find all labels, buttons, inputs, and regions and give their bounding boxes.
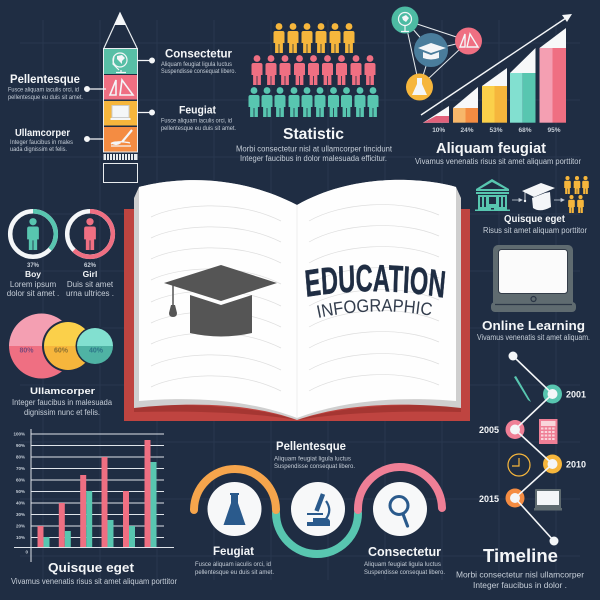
icon: microscope circle	[291, 482, 345, 536]
icon: laptop	[110, 106, 130, 120]
year labels	[479, 390, 586, 504]
axis labels: 90%	[16, 443, 25, 448]
chart grid and axes	[14, 429, 174, 562]
pink bars	[38, 440, 150, 547]
icon: flask circle	[208, 482, 262, 536]
text: pellentesque	[274, 439, 355, 470]
axis labels: 40%	[16, 500, 25, 506]
text: consectetur	[364, 545, 445, 576]
text: statistic body	[236, 144, 393, 163]
panel: online learning	[477, 245, 590, 342]
icon: laptop small	[534, 489, 562, 510]
text: statistic body: Integer faucibus in dolor malesuada efficitur.	[240, 154, 387, 163]
arrow	[421, 14, 572, 115]
page block	[134, 180, 461, 420]
icon: cap	[522, 183, 555, 210]
text: consectetur	[161, 46, 236, 75]
panel: ullamcorper venn	[9, 314, 114, 417]
axis labels: 30%	[16, 512, 25, 517]
text: chart body: Vivamus venenatis risus sit amet aliquam porttitor	[11, 577, 177, 586]
text: ullamcorper: uada dignissim et felis.	[10, 147, 67, 153]
text: feugiat: Fusce aliquam iaculis orci, id	[161, 118, 232, 124]
text: feugiat: pellentesque eu duis sit amet.	[161, 126, 236, 132]
pictogram: pink people	[252, 55, 376, 85]
percentage labels: 53%	[489, 127, 503, 134]
text: pellentesque: Pellentesque	[10, 74, 80, 86]
text: boy: dolor sit amet .	[7, 289, 59, 298]
cover shadow	[134, 405, 461, 420]
title: education	[305, 264, 446, 298]
text: consectetur: Consectetur	[165, 46, 232, 60]
text: feugiat	[195, 546, 274, 576]
text: girl: 62%	[84, 263, 97, 269]
text: girl: urna ultrices .	[66, 289, 114, 298]
donut: boy	[10, 211, 56, 257]
axis labels: 60%	[16, 478, 25, 482]
text: feugiat: Feugiat	[213, 546, 254, 558]
year labels: 2001	[566, 390, 586, 400]
text: quisque body: Risus sit amet aliquam porttitor	[483, 226, 587, 235]
axis labels: 50%	[16, 489, 25, 494]
venn circles	[9, 314, 114, 378]
panel: statistic	[236, 23, 393, 163]
arrow: bank to cap	[512, 198, 522, 202]
panel: boy girl ratio	[7, 211, 114, 298]
connectors	[85, 58, 154, 141]
text: aliquam body: Vivamus venenatis risus sit amet aliquam porttitor	[415, 157, 581, 166]
text: ullamcorper body: Integer faucibus in malesuada	[12, 398, 113, 407]
text: timeline body: Morbi consectetur nisl ullamcorper	[456, 570, 584, 580]
heading: quisque eget: Quisque eget	[48, 561, 135, 575]
axis labels: 100%	[13, 432, 25, 436]
pictogram: green people	[248, 87, 378, 117]
heading: ullamcorper: Ullamcorper	[30, 386, 95, 397]
axis labels: 0	[25, 550, 28, 554]
axis labels: 20%	[16, 524, 25, 528]
text: pellentesque	[8, 74, 83, 101]
icon: globe	[113, 53, 127, 72]
venn labels	[19, 348, 104, 354]
title: education: EDUCATION	[305, 264, 446, 298]
icon: people	[564, 176, 589, 213]
bars	[423, 28, 566, 123]
subtitle: infographic: INFOGRAPHIC	[317, 299, 432, 318]
year labels: 2015	[479, 494, 499, 504]
heading: timeline: Timeline	[483, 546, 558, 566]
panel: pencil list	[8, 12, 236, 182]
axis labels: 80%	[16, 454, 25, 460]
icon: pencil	[514, 376, 531, 402]
heading: quisque eget: Quisque eget	[504, 213, 565, 225]
percentage labels: 10%	[432, 127, 445, 134]
text: timeline body: Integer faucibus in dolor .	[473, 581, 567, 590]
text: ullamcorper: Integer faucibus in males	[10, 140, 73, 146]
panel: bar chart	[11, 429, 177, 586]
pages	[139, 180, 456, 418]
icon: magnifier circle	[373, 482, 427, 536]
text: ullamcorper body: dignissim nunc et felis.	[24, 408, 100, 417]
text: feugiat: Feugiat	[179, 104, 216, 116]
wave arcs	[194, 467, 442, 554]
text: boy	[7, 263, 59, 298]
icon: girl	[84, 218, 96, 250]
icon: boy	[27, 218, 39, 250]
percentage labels	[432, 127, 561, 134]
text: ullamcorper	[10, 128, 73, 153]
text: boy: 37%	[27, 263, 40, 269]
axis labels: 10%	[16, 535, 25, 540]
icon: laptop	[491, 245, 576, 312]
axis labels	[13, 432, 28, 554]
venn labels: 60%	[54, 348, 69, 354]
text: pellentesque: Fusce aliquam iaculis orci, id	[8, 88, 79, 94]
text: consectetur: Consectetur	[368, 545, 441, 559]
green bars	[44, 462, 156, 547]
percentage labels: 68%	[518, 127, 532, 134]
text: consectetur: Suspendisse consequat libero.	[161, 69, 236, 75]
icon: calculator	[539, 419, 558, 444]
panel: wave process	[194, 439, 445, 576]
icon: pencil	[104, 12, 138, 182]
axis labels: 70%	[16, 466, 25, 471]
percentage labels: 24%	[460, 127, 474, 134]
arrow: cap to people	[554, 198, 564, 202]
panel: timeline	[456, 352, 586, 590]
zigzag timeline	[506, 352, 562, 546]
text: boy: Lorem ipsum	[10, 280, 56, 289]
text: girl: Girl	[83, 269, 97, 279]
venn labels: 40%	[89, 348, 104, 354]
icon: bank	[475, 179, 510, 211]
text: statistic body: Morbi consectetur nisl at ullamcorper tincidunt	[236, 144, 393, 154]
panel: aliquam feugiat chart	[392, 6, 581, 166]
panel: quisque eget flow	[475, 176, 589, 235]
year labels: 2005	[479, 425, 499, 435]
text: pellentesque: Pellentesque	[276, 439, 346, 453]
text: consectetur: Suspendisse consequat libero.	[364, 570, 445, 576]
text: consectetur: Aliquam feugiat ligula luctus	[364, 562, 441, 568]
icon: clock	[508, 454, 530, 476]
text: boy: Boy	[25, 269, 41, 279]
subtitle: infographic	[317, 299, 432, 318]
icon: graduation cap	[164, 265, 277, 336]
text: girl	[66, 263, 114, 298]
year labels: 2010	[566, 460, 586, 470]
percentage labels: 95%	[547, 127, 561, 134]
text: feugiat: Fusce aliquam iaculis orci, id	[195, 562, 271, 568]
text: feugiat	[161, 104, 236, 132]
text: pellentesque: pellentesque eu duis sit amet.	[8, 95, 83, 101]
text: consectetur: Aliquam feugiat ligula luctus	[161, 62, 232, 68]
text: girl: Duis sit amet	[67, 280, 114, 289]
heading: aliquam feugiat: Aliquam feugiat	[436, 141, 546, 157]
venn labels: 80%	[19, 348, 34, 354]
text: feugiat: pellentesque eu duis sit amet.	[195, 570, 274, 576]
text: ullamcorper body	[12, 398, 113, 417]
text: timeline body	[456, 570, 584, 590]
icon: set squares	[110, 80, 133, 95]
pictogram: yellow people	[274, 23, 354, 53]
text: pellentesque: Aliquam feugiat ligula luctus	[274, 456, 351, 462]
page ruled lines	[151, 205, 439, 418]
heading: online learning: Online Learning	[482, 318, 585, 333]
text: ullamcorper: Ullamcorper	[15, 128, 70, 139]
panel: open book	[124, 180, 470, 421]
icon: pen and book	[111, 130, 132, 146]
book cover	[124, 209, 470, 421]
donut: girl	[67, 211, 113, 257]
heading: statistic: Statistic	[283, 126, 344, 143]
text: pellentesque: Suspendisse consequat libero.	[274, 464, 355, 470]
network of icons	[392, 6, 482, 100]
